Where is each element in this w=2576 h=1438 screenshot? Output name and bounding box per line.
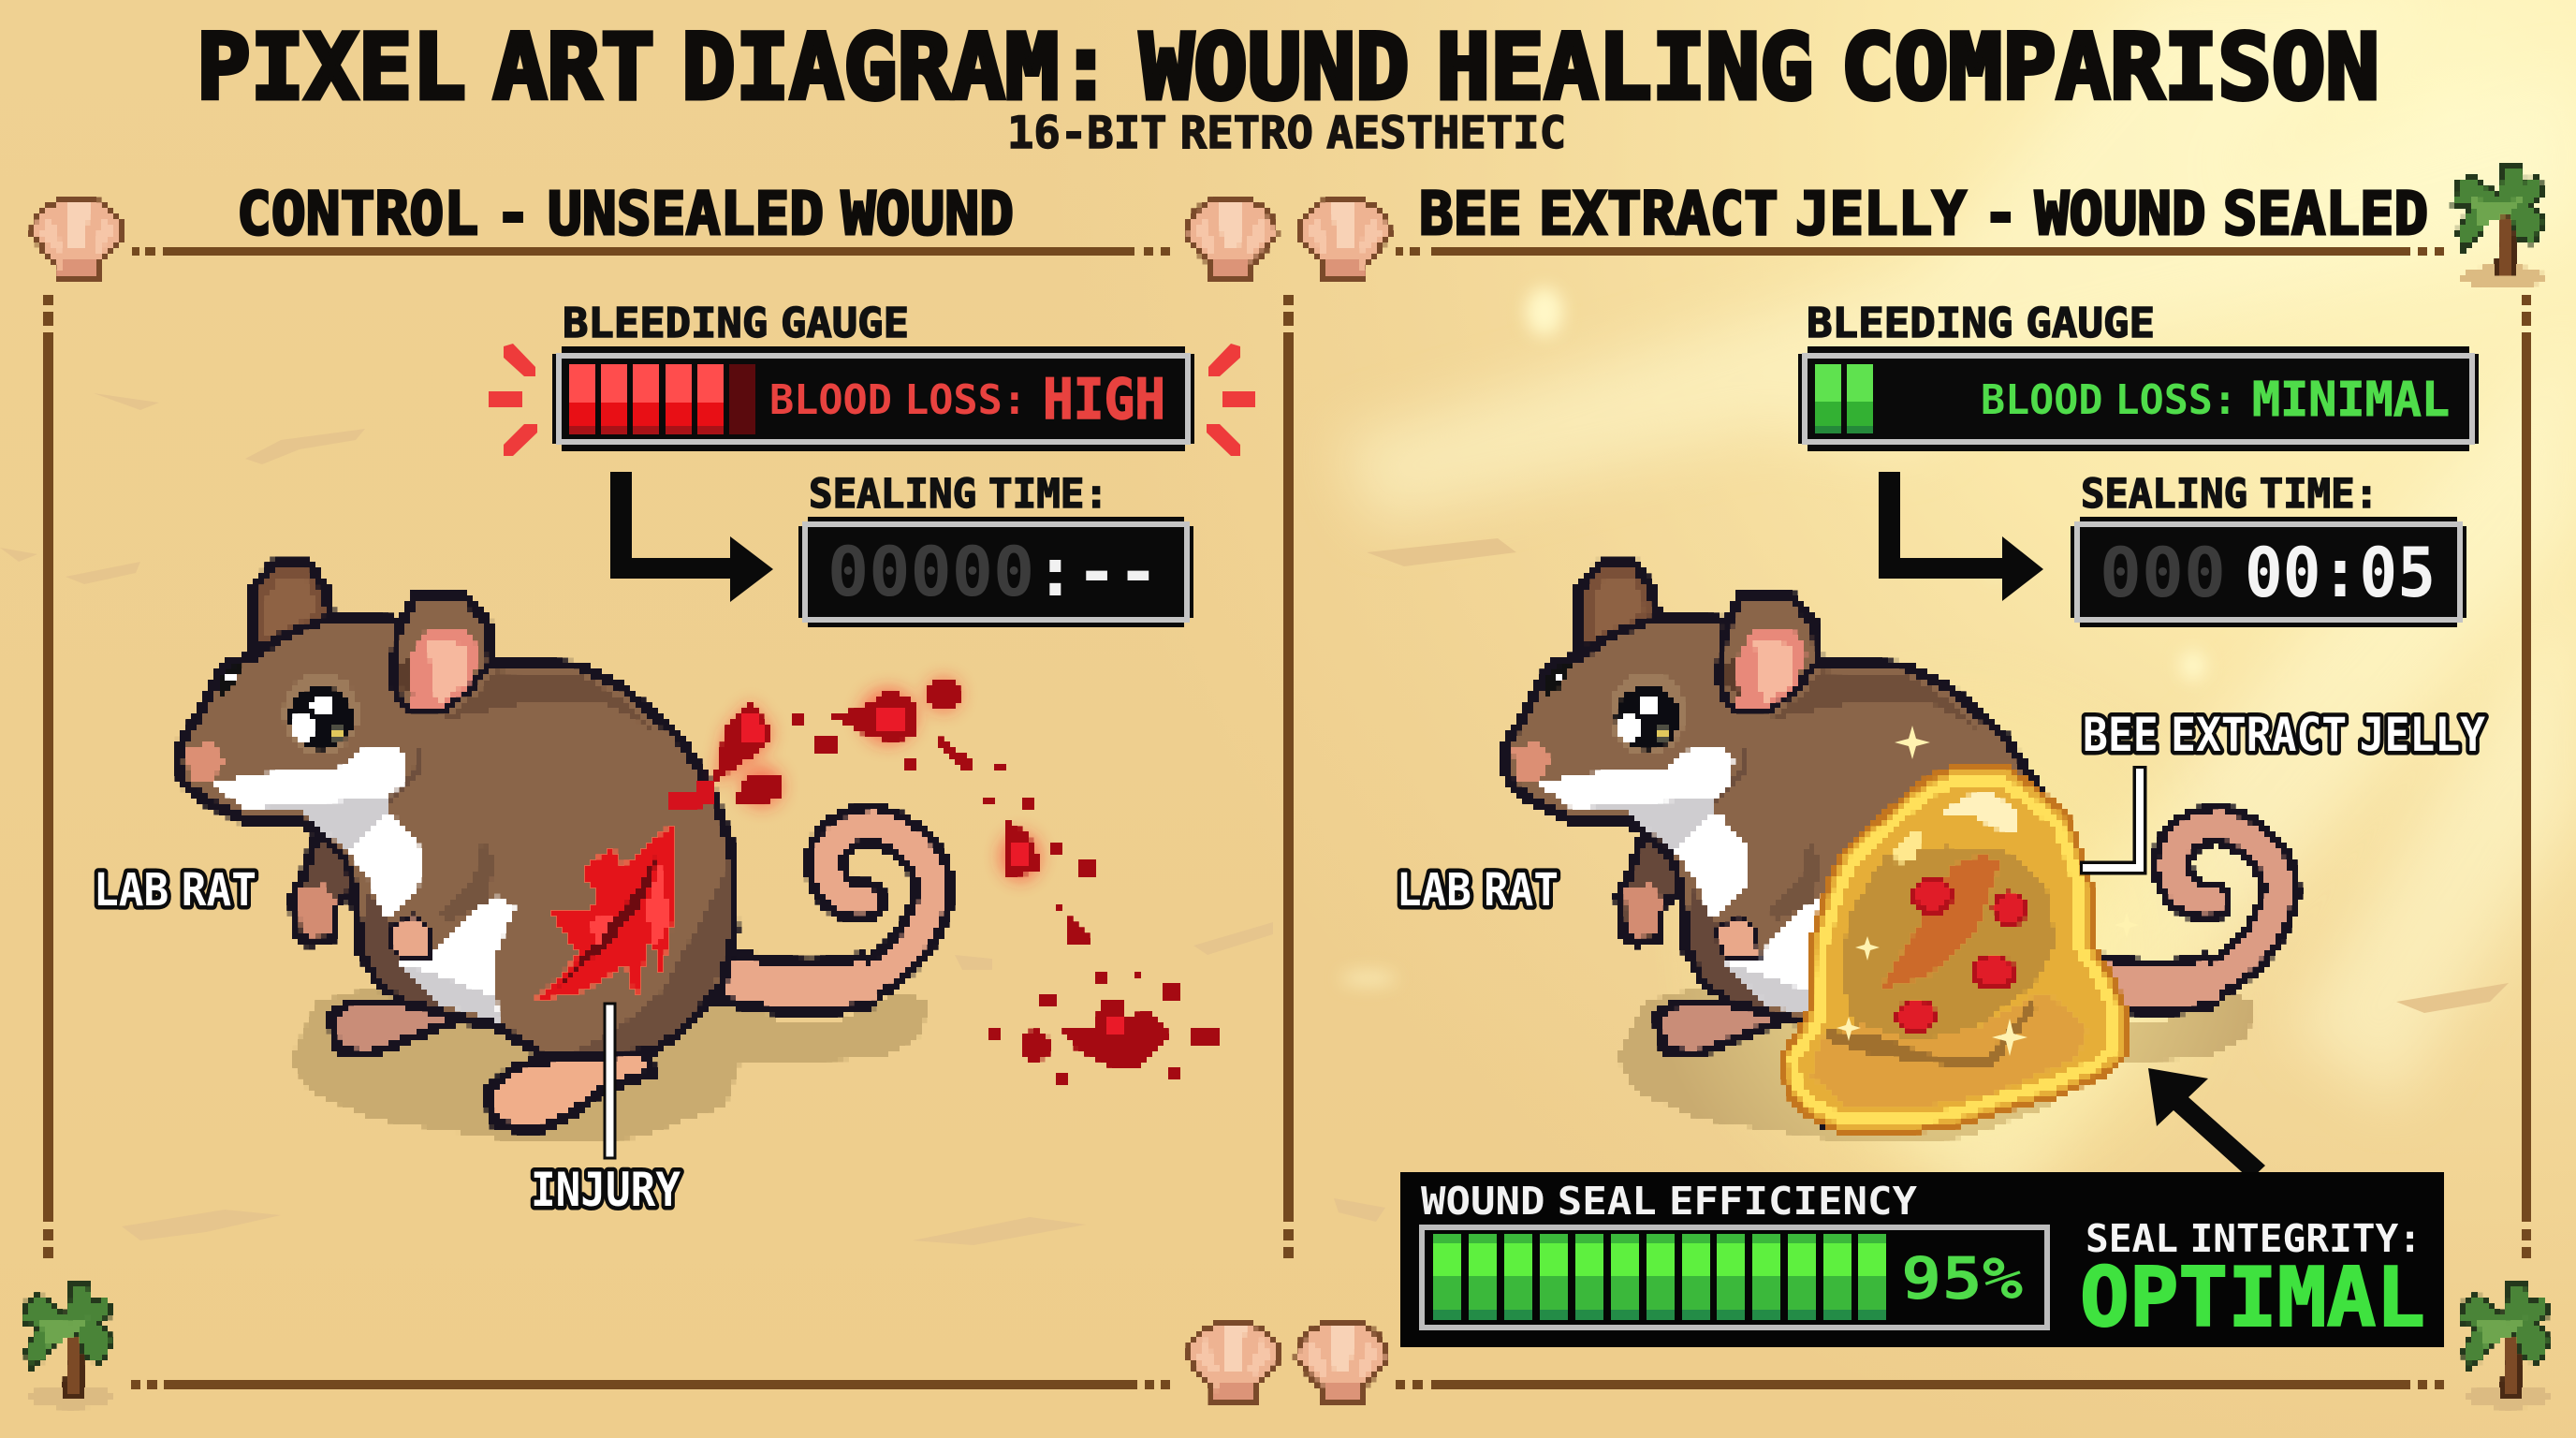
icon: shell top left — [33, 199, 123, 278]
icon: shell top centre left — [1186, 199, 1276, 278]
wound — [533, 824, 676, 1002]
sparkles — [1837, 726, 2139, 1056]
shadow: rat — [1617, 983, 2253, 1142]
efficiency heading: WOUND SEAL EFFICIENCY — [1421, 1179, 1917, 1224]
panel: control — [94, 300, 1255, 1217]
label: injury: INJURY — [531, 1163, 681, 1217]
bleeding gauge: high: HIGH — [1043, 367, 1165, 433]
gauge bars — [569, 364, 755, 434]
arrow to jelly — [2148, 1068, 2265, 1180]
panel frames — [43, 247, 2531, 1389]
blood droplets — [670, 679, 1217, 1084]
arrow to sealing time — [610, 472, 773, 602]
gauge text: BLOOD LOSS: — [769, 376, 1027, 424]
sealing time label: SEALING TIME: — [809, 471, 1108, 518]
efficiency bar frame — [1422, 1227, 2047, 1328]
panel heading: bee extract: BEE EXTRACT JELLY - WOUND SEALED — [1419, 180, 2428, 248]
rat — [1504, 565, 2060, 1131]
seal integrity label: SEAL INTEGRITY: — [2086, 1216, 2422, 1261]
label: lab rat: LAB RAT — [1397, 864, 1559, 917]
arrow to sealing time — [1879, 472, 2043, 601]
bleeding gauge: high — [552, 346, 1194, 451]
sealing timer — [2071, 517, 2466, 627]
shadow: rat — [291, 983, 927, 1142]
icon: shell bottom centre right — [1297, 1323, 1387, 1401]
alarm ticks — [489, 344, 1255, 456]
jelly seal — [1783, 726, 2139, 1131]
background glow — [1030, 0, 2576, 1438]
panel heading: control: CONTROL - UNSEALED WOUND — [237, 180, 1014, 248]
jelly leader line inner — [2083, 769, 2140, 868]
icon: palm bottom left — [22, 1284, 112, 1408]
subtitle: 16-BIT RETRO AESTHETIC — [1007, 108, 1566, 159]
sealing timer: 000 — [2100, 534, 2226, 613]
rat tail — [716, 824, 934, 988]
jelly leader line — [2080, 766, 2140, 868]
title: PIXEL ART DIAGRAM: WOUND HEALING COMPARISON — [197, 15, 2379, 120]
light spots — [1340, 287, 2206, 986]
rat tail — [2071, 824, 2280, 988]
bleeding gauge: minimal — [1798, 346, 2479, 451]
gauge bars — [1815, 364, 1873, 433]
sealing timer — [798, 517, 1193, 627]
bleeding gauge: minimal: MINIMAL — [2252, 373, 2450, 428]
blood glow — [714, 678, 1041, 881]
icon: palm top right — [2454, 165, 2544, 288]
icon: shell bottom centre left — [1189, 1323, 1279, 1401]
icon: shell top centre right — [1299, 199, 1389, 278]
efficiency bars — [1433, 1234, 1886, 1320]
injury leader line — [605, 1004, 615, 1158]
jelly body — [1783, 768, 2125, 1131]
jelly glow — [1647, 637, 2265, 1255]
light rays — [1339, 0, 2576, 1217]
panel: bee extract jelly — [1397, 300, 2485, 1347]
bleeding gauge label: BLEEDING GAUGE — [563, 300, 909, 347]
sealing timer: 00000:-- — [827, 533, 1159, 612]
label: lab rat: LAB RAT — [94, 864, 256, 917]
label: bee extract jelly: BEE EXTRACT JELLY — [2083, 708, 2485, 762]
seal integrity value: OPTIMAL — [2080, 1250, 2425, 1345]
efficiency value: 95% — [1901, 1244, 2023, 1313]
gauge text: BLOOD LOSS: — [1981, 376, 2237, 424]
rat — [178, 565, 734, 1131]
sealing time label: SEALING TIME: — [2081, 471, 2378, 518]
icon: palm bottom right — [2460, 1284, 2550, 1408]
bleeding gauge label: BLEEDING GAUGE — [1807, 300, 2155, 347]
sand marks — [0, 393, 2509, 1245]
sealing timer: 00:05 — [2245, 534, 2436, 613]
efficiency panel — [1400, 1172, 2444, 1347]
